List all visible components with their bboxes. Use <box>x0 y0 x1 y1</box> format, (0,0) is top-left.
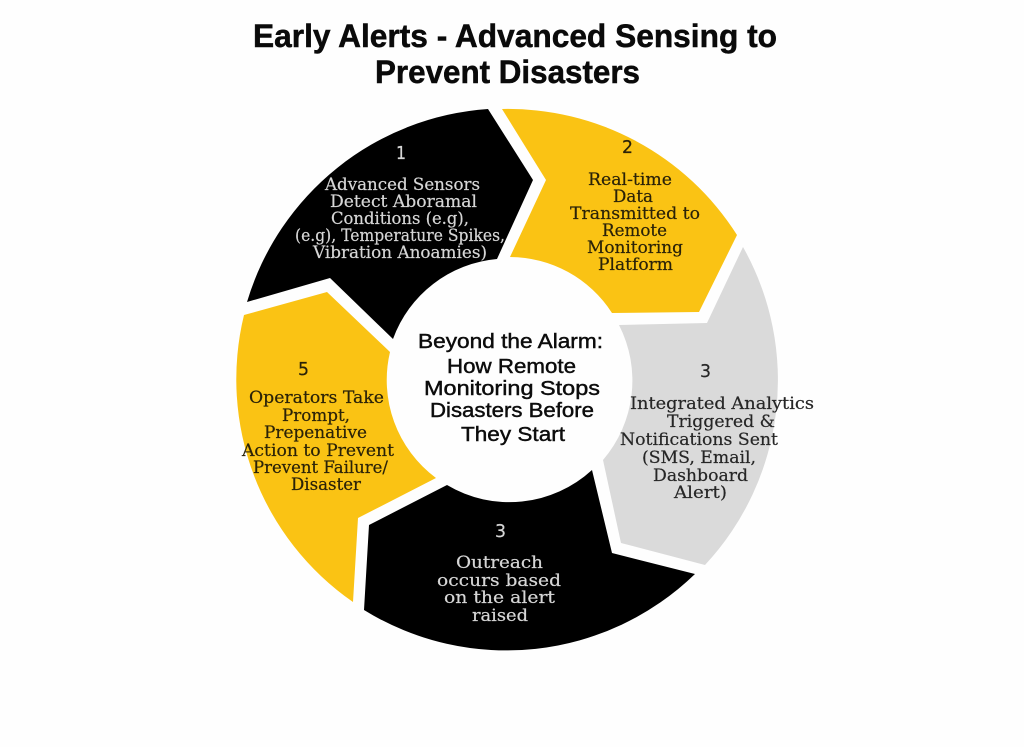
panel: step 2 data transmission: 2 <box>622 137 633 158</box>
panel: step 1 sensors: Advanced Sensors <box>324 175 480 194</box>
center text: They Start <box>461 423 565 446</box>
panel: step 3 analytics and notifications: (SMS, Email, <box>642 448 756 467</box>
panel: step 3 analytics and notifications: Integrated Analytics <box>630 394 814 413</box>
center text: Beyond the Alarm: <box>418 330 603 353</box>
panel: step 1 sensors <box>247 109 533 339</box>
panel: step 5 operator action: Action to Prevent <box>241 441 394 460</box>
panel: step 5 operator action: Operators Take <box>249 388 384 407</box>
panel: step 2 data transmission: Platform <box>598 255 673 274</box>
panel: step 5 operator action <box>236 292 436 602</box>
panel: step 1 sensors: Conditions (e.g), <box>331 209 469 228</box>
title: Early Alerts - Advanced Sensing to <box>253 18 777 54</box>
panel: step 4 outreach: 3 <box>495 521 506 542</box>
panel: step 3 analytics and notifications: Dashboard <box>653 466 748 485</box>
center text: Disasters Before <box>430 399 594 422</box>
panel: step 3 analytics and notifications: Notifications Sent <box>620 430 778 449</box>
center text: How Remote <box>447 355 576 378</box>
panel: step 1 sensors: 1 <box>396 143 406 164</box>
panel: step 5 operator action: Prompt, <box>282 406 350 425</box>
panel: step 1 sensors: Vibration Anoamies) <box>312 243 487 262</box>
panel: step 5 operator action: 5 <box>298 359 309 380</box>
panel: step 2 data transmission <box>502 109 737 313</box>
panel: step 2 data transmission: Real-time <box>588 170 672 189</box>
panel: step 4 outreach <box>364 470 695 650</box>
panel: step 1 sensors: (e.g), Temperature Spikes, <box>295 226 505 245</box>
panel: step 2 data transmission: Remote <box>602 221 667 240</box>
panel: step 4 outreach: Outreach <box>456 553 543 572</box>
panel: step 3 analytics and notifications: Triggered & <box>667 412 775 431</box>
panel: step 5 operator action: Prepenative <box>264 423 367 442</box>
panel: step 2 data transmission: Data <box>613 187 653 206</box>
title <box>253 18 777 90</box>
panel: step 5 operator action: Prevent Failure/ <box>253 458 388 477</box>
center text: Monitoring Stops <box>424 377 600 400</box>
center text <box>418 330 603 446</box>
panel: step 3 analytics and notifications <box>603 247 814 565</box>
panel: step 4 outreach: occurs based <box>437 571 561 590</box>
panel: step 3 analytics and notifications: 3 <box>700 361 711 382</box>
panel: step 2 data transmission: Monitoring <box>587 238 683 257</box>
panel: step 2 data transmission: Transmitted to <box>570 204 700 223</box>
panel: step 1 sensors: Detect Aboramal <box>330 192 477 211</box>
panel: step 5 operator action: Disaster <box>291 475 361 494</box>
title: Prevent Disasters <box>375 54 640 90</box>
panel: step 4 outreach: on the alert <box>444 588 555 607</box>
panel: step 3 analytics and notifications: Alert) <box>673 483 727 502</box>
panel: step 4 outreach: raised <box>472 606 528 625</box>
